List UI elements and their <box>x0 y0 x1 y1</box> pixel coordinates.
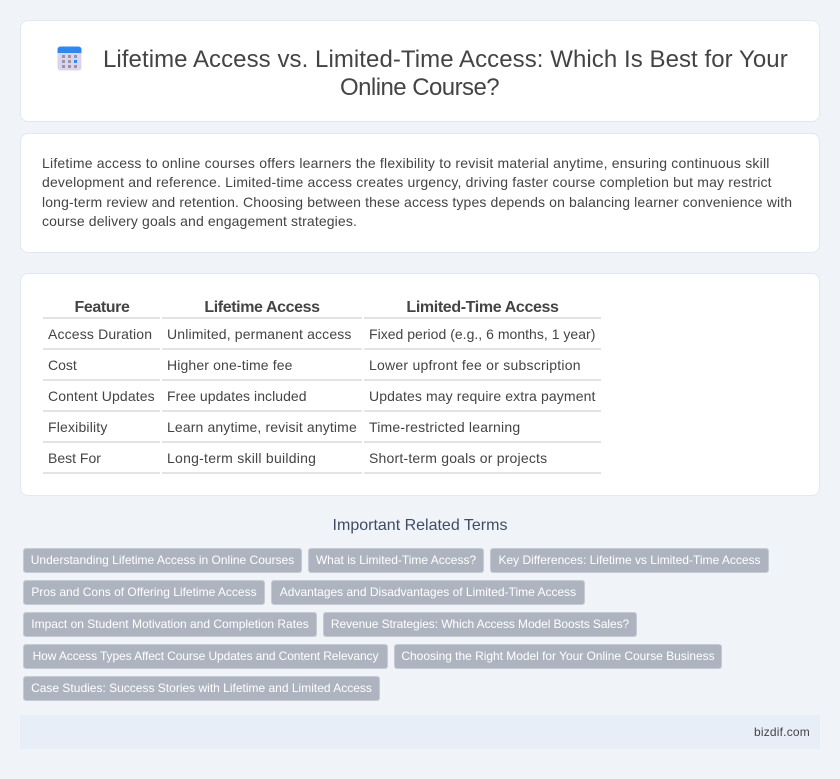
tag: Key Differences: Lifetime vs Limited-Time Access <box>498 553 761 567</box>
title line 1: Lifetime Access vs. Limited-Time Access: Which Is Best for Your <box>103 46 788 73</box>
intro line 2: development and reference. Limited-time access creates urgency, driving faster course completion but may restrict <box>42 174 772 190</box>
row: Content Updates: Updates may require extra payment <box>369 388 596 404</box>
panel: introduction <box>20 133 820 253</box>
table header: Lifetime Access: Lifetime Access <box>204 299 320 316</box>
tag <box>271 580 585 605</box>
footer: site name: bizdif.com <box>754 725 810 739</box>
tag <box>308 548 484 573</box>
row: Access Duration <box>48 326 595 342</box>
icon: calendar <box>58 46 82 70</box>
tag: Understanding Lifetime Access in Online Courses <box>31 553 294 567</box>
row: Access Duration: Access Duration <box>48 326 152 342</box>
row: Content Updates: Free updates included <box>167 388 307 404</box>
row: Cost: Lower upfront fee or subscription <box>369 357 581 373</box>
related terms tags <box>23 548 769 701</box>
tag <box>23 580 265 605</box>
row: Cost: Higher one-time fee <box>167 357 293 373</box>
table header: Limited-Time Access: Limited-Time Access <box>406 299 559 316</box>
heading: Important Related Terms: Important Related Terms <box>333 517 507 534</box>
tag: Pros and Cons of Offering Lifetime Access <box>31 585 257 599</box>
tag: Impact on Student Motivation and Completion Rates <box>31 617 309 631</box>
row: Best For: Best For <box>48 450 101 466</box>
row: Content Updates <box>48 388 596 404</box>
row: Flexibility <box>48 419 520 435</box>
row: Best For: Long-term skill building <box>167 450 316 466</box>
tag <box>23 612 317 637</box>
tag <box>23 548 302 573</box>
tag: How Access Types Affect Course Updates and Content Relevancy <box>33 649 378 663</box>
tag: What is Limited-Time Access? <box>316 553 476 567</box>
intro line 3: long-term review and retention. Choosing between these access types depends on balancing learner convenience with <box>42 194 792 210</box>
row: Cost <box>48 357 581 373</box>
row: Access Duration: Fixed period (e.g., 6 months, 1 year) <box>369 326 595 342</box>
row: Access Duration: Unlimited, permanent access <box>167 326 352 342</box>
footer bar <box>20 715 820 749</box>
panel: comparison table <box>20 273 820 496</box>
tag: Case Studies: Success Stories with Lifetime and Limited Access <box>31 681 372 695</box>
row: Best For <box>48 450 547 466</box>
tag <box>394 644 722 669</box>
row: Best For: Short-term goals or projects <box>369 450 547 466</box>
tag <box>23 644 388 669</box>
title line 2: Online Course? <box>340 74 499 101</box>
row: Flexibility: Learn anytime, revisit anytime <box>167 419 357 435</box>
row: Flexibility: Time-restricted learning <box>369 419 520 435</box>
tag: Choosing the Right Model for Your Online Course Business <box>401 649 715 663</box>
intro line 1: Lifetime access to online courses offers learners the flexibility to revisit material anytime, ensuring continuous skill <box>42 155 770 171</box>
tag <box>490 548 769 573</box>
tag <box>23 676 380 701</box>
row: Cost: Cost <box>48 357 77 373</box>
row: Flexibility: Flexibility <box>48 419 108 435</box>
table header: Feature: Feature <box>74 299 130 316</box>
tag: Revenue Strategies: Which Access Model Boosts Sales? <box>331 617 629 631</box>
row: Content Updates: Content Updates <box>48 388 155 404</box>
tag: Advantages and Disadvantages of Limited-Time Access <box>280 585 576 599</box>
intro line 4: course delivery goals and engagement strategies. <box>42 213 357 229</box>
tag <box>323 612 637 637</box>
panel: title card <box>20 20 820 122</box>
